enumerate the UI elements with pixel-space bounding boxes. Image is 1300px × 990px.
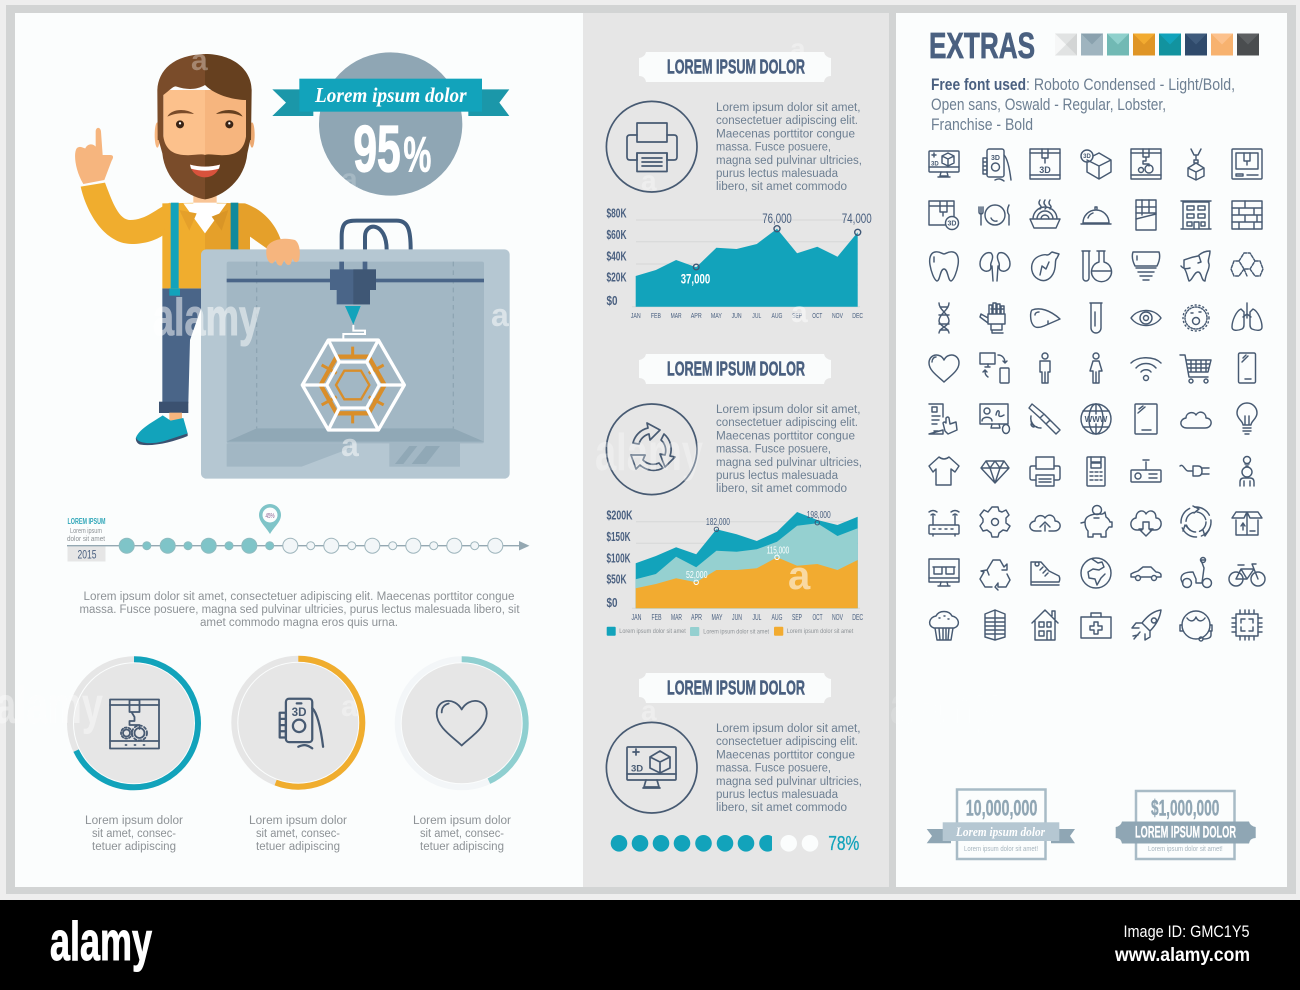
watermarks: alamy (153, 289, 260, 347)
icon: cloche (1081, 207, 1111, 224)
body text: libero, sit amet commodo (716, 483, 847, 495)
alamy logo: alamy (50, 910, 152, 972)
icon: DNA (939, 303, 949, 333)
icon: touch phone (929, 404, 957, 434)
icon: printer (1030, 457, 1060, 486)
body text: Lorem ipsum dolor sit amet, (716, 404, 860, 416)
icon: car (1131, 567, 1161, 580)
badge: 10,000,000: 10,000,000 (966, 796, 1037, 820)
paragraph (80, 591, 520, 629)
series: orange (636, 557, 858, 608)
x axis months: JAN (631, 311, 641, 320)
data callouts (686, 509, 831, 584)
x axis months: JUL (752, 612, 762, 622)
extras heading: EXTRAS (929, 25, 1035, 66)
illustration: man with 3D printer (75, 52, 510, 479)
x axis months: AUG (772, 612, 782, 622)
icon: www globe (1081, 404, 1111, 434)
icon: 3D printer (1030, 149, 1060, 179)
paragraph: amet commodo magna eros quis urna. (200, 617, 398, 629)
dot progress: 78%: 78% (828, 833, 859, 855)
body text: consectetuer adipiscing elit. (716, 417, 858, 429)
area chart 1 (606, 206, 872, 320)
timeline label: LOREM IPSUM (68, 517, 106, 526)
watermarks: alamy (595, 424, 703, 482)
stacked area chart (606, 508, 863, 636)
paragraph: massa. Fusce posuere, magna sed pulvinar ultricies, purus lectus malesuada libero, sit (80, 604, 520, 616)
icon: device sync (980, 353, 1009, 383)
data callouts: 198,000 (807, 509, 831, 521)
icon: phone in hand (983, 149, 1011, 181)
heading plate: LOREM IPSUM DOLOR (667, 56, 805, 78)
colour swatches (1055, 34, 1259, 56)
heading plate (639, 673, 831, 703)
icon: 3D cube: 3D (1083, 154, 1092, 160)
icon: printer 3D badge (929, 201, 958, 230)
heading plate (639, 52, 831, 82)
x axis months: JUL (752, 311, 761, 320)
x axis months: JUN (732, 612, 742, 622)
icon: wifi (1131, 358, 1161, 380)
icon: monitor with person (980, 404, 1010, 434)
data callouts: 182,000 (706, 516, 730, 528)
icon: light bulb (1237, 403, 1257, 434)
icon: person with idea (1240, 456, 1254, 486)
heading plate: LOREM IPSUM DOLOR (667, 678, 805, 700)
icon: molecules (1231, 253, 1263, 276)
icon: skyscraper (985, 610, 1005, 640)
body text (716, 723, 862, 814)
icon: liver (1031, 309, 1060, 327)
icon: 3D monitor in circle: 3D (631, 764, 643, 774)
caption: tetuer adipiscing (92, 841, 176, 853)
icon: monitor with 3D glasses (929, 559, 959, 586)
icon: 3D printer: 3D (1039, 165, 1051, 175)
caption: Lorem ipsum dolor (413, 815, 511, 827)
icon grid (929, 149, 1265, 641)
badge: 10,000,000: Lorem ipsum dolor (955, 824, 1046, 839)
x axis months: APR (691, 612, 702, 622)
body text: Lorem ipsum dolor sit amet, (716, 102, 860, 114)
icon: heart anatomy (1032, 252, 1059, 281)
icon: phone in hand: 3D (292, 706, 306, 719)
icon: piggy bank (1081, 506, 1112, 537)
icon: kidneys (980, 253, 1010, 281)
y axis labels (606, 206, 626, 308)
icon: house (1032, 610, 1058, 640)
badge: $1,000,000 (1116, 791, 1256, 859)
watermarks: a (791, 296, 808, 329)
x axis months: FEB (651, 311, 661, 320)
y axis labels: $20K (606, 270, 626, 284)
x axis months: MAR (671, 612, 682, 622)
font credits: : Roboto Condensed - Light/Bold, (1026, 75, 1235, 94)
watermarks: a (191, 44, 208, 77)
badge: 10,000,000 (927, 790, 1075, 859)
paragraph: Lorem ipsum dolor sit amet, consectetuer adipiscing elit. Maecenas porttitor congue (84, 591, 514, 603)
heading plate: LOREM IPSUM DOLOR (667, 358, 805, 380)
series: light teal (636, 523, 858, 608)
x axis months: DEC (852, 311, 864, 320)
body text: Maecenas porttitor congue (716, 749, 855, 761)
icon: rocket (1132, 610, 1161, 640)
x axis months: OCT (812, 311, 823, 320)
ribbon: Lorem ipsum dolor (314, 85, 468, 107)
x axis months: MAR (671, 311, 682, 320)
icon: heart (437, 701, 487, 746)
timeline label: 2015 (78, 548, 97, 562)
body text: libero, sit amet commodo (716, 802, 847, 814)
font credits: Franchise - Bold (931, 115, 1033, 134)
icon: cloud (1181, 412, 1211, 428)
icon: www globe: WWW (1085, 415, 1108, 424)
watermarks: a (491, 297, 509, 333)
body text: purus lectus malesuada (716, 789, 839, 801)
icon: printer in circle (606, 101, 697, 192)
icon: lungs (1232, 303, 1262, 330)
timeline (67, 504, 530, 562)
man (75, 54, 281, 445)
icon: shopping cart (1180, 355, 1211, 383)
timeline label: Lorem ipsum (70, 528, 102, 535)
icon: card reader (1087, 457, 1105, 486)
panel: middle (583, 13, 889, 887)
icon: bicycle (1229, 564, 1265, 586)
watermarks: a (641, 165, 657, 196)
caption: Lorem ipsum dolor (85, 815, 183, 827)
body text (716, 404, 862, 495)
3D printer (201, 221, 510, 479)
x axis months: DEC (852, 612, 863, 622)
section 1 (606, 52, 872, 320)
icon: 3D monitor (929, 151, 959, 177)
y axis labels: $60K (606, 228, 626, 242)
timeline label: dolor sit amet (67, 536, 105, 543)
icon: heart (929, 355, 959, 382)
badge: 10,000,000: Lorem ipsum dolor sit amet! (964, 846, 1038, 853)
font credits: Open sans, Oswald - Regular, Lobster, (931, 95, 1166, 114)
value: 95%: % (403, 126, 431, 182)
icon: projector (1131, 460, 1161, 482)
watermarks: a (341, 427, 359, 463)
y axis labels (606, 508, 633, 610)
body text (716, 102, 862, 193)
icon: smartphone (1238, 353, 1256, 383)
icon: cycle in circle (606, 404, 697, 495)
x axis months: SEP (792, 612, 802, 622)
body text: Maecenas porttitor congue (716, 430, 855, 442)
progress ring: mobile 3D (234, 659, 362, 853)
y axis labels: $40K (606, 250, 626, 264)
icon: gear (980, 507, 1010, 537)
watermarks: a (341, 163, 358, 196)
icon: dental implant (1132, 252, 1160, 280)
icon: test tube and flask (1082, 251, 1112, 282)
icon: diamond (981, 461, 1009, 483)
icon: test tube (1090, 303, 1102, 333)
x axis months (631, 311, 864, 320)
body text: massa. Fusce posuere, (716, 444, 831, 456)
value: 95%: 95 (353, 111, 401, 185)
caption: sit amet, consec- (420, 828, 504, 840)
image id: Image ID: GMC1Y5 (1124, 922, 1250, 941)
icon: broken tooth (1181, 251, 1210, 281)
data callouts: 74,000 (842, 210, 872, 226)
data callouts: 52,000 (686, 569, 708, 581)
caption (413, 815, 511, 853)
icon: printer with gears (1131, 149, 1161, 179)
icon: t-shirt (929, 457, 959, 485)
icon: cycle arrows (1181, 506, 1211, 537)
section 2 (606, 354, 863, 636)
y axis labels: $80K (606, 206, 626, 220)
caption (85, 815, 183, 853)
icon: robot hand (980, 303, 1005, 333)
icon: satellite (1029, 404, 1060, 434)
icon: plate and cutlery (979, 205, 1009, 225)
x axis months: OCT (812, 612, 822, 622)
icon: cloud upload (1030, 515, 1060, 531)
icon: recycle (980, 560, 1010, 590)
timeline nodes: completed (119, 538, 274, 553)
series: teal (636, 512, 858, 608)
progress ring: heart (398, 659, 526, 853)
progress ring: 3D printer (70, 659, 198, 853)
caption: sit amet, consec- (92, 828, 176, 840)
timeline axis (67, 541, 530, 550)
body text: Lorem ipsum dolor sit amet, (716, 723, 860, 735)
timeline nodes: remaining (283, 538, 503, 553)
caption: Lorem ipsum dolor (249, 815, 347, 827)
caption: tetuer adipiscing (256, 841, 340, 853)
icon: office building (1181, 201, 1211, 229)
y axis labels: $200K (606, 508, 633, 522)
x axis months: SEP (792, 311, 802, 320)
section 3 (606, 673, 862, 855)
icon: 3D cube (1081, 150, 1111, 179)
body text: massa. Fusce posuere, (716, 142, 831, 154)
icon: man (1040, 353, 1050, 383)
footer bar (0, 900, 1300, 990)
body text: consectetuer adipiscing elit. (716, 736, 858, 748)
x axis months (632, 612, 863, 622)
body text: magna sed pulvinar ultricies, (716, 457, 862, 469)
body text: purus lectus malesuada (716, 168, 839, 180)
icon: tablet (1135, 404, 1157, 434)
font credits (931, 75, 1235, 134)
x axis months: JUN (732, 311, 742, 320)
body text: consectetuer adipiscing elit. (716, 115, 858, 127)
dot progress: 78% (611, 833, 859, 855)
badge: $1,000,000: Lorem ipsum dolor sit amet! (1148, 846, 1223, 853)
panel: left (15, 13, 583, 887)
icon: headset support (1180, 611, 1212, 641)
y axis labels: $0 (606, 595, 618, 610)
icon: earth (1081, 558, 1111, 588)
icon: open box (1232, 512, 1262, 535)
body text: massa. Fusce posuere, (716, 763, 831, 775)
icon: first aid kit (1081, 613, 1111, 638)
watermarks: alamy (890, 677, 998, 735)
data callouts (681, 210, 872, 286)
icon: scooter (1181, 558, 1212, 588)
font credits: Free font used (931, 75, 1026, 94)
x axis months: MAY (711, 311, 722, 320)
icon: chocolate bar (1136, 200, 1156, 230)
icon: brick wall (1232, 201, 1262, 229)
panel: extras (896, 13, 1287, 887)
watermarks: a (790, 33, 806, 64)
area series (636, 229, 858, 307)
icon: sneaker (1031, 562, 1060, 585)
body text: purus lectus malesuada (716, 470, 839, 482)
icon: printer with gears (110, 700, 159, 748)
ribbon (272, 79, 509, 116)
data callouts: 37,000 (681, 270, 710, 286)
timeline label (67, 517, 106, 562)
y axis labels: $100K (606, 550, 631, 566)
y axis labels: $0 (606, 294, 618, 308)
icon: noodles bowl (1030, 200, 1060, 228)
caption: sit amet, consec- (256, 828, 340, 840)
icon: phone in hand (280, 699, 323, 748)
body text: libero, sit amet commodo (716, 181, 847, 193)
x axis months: MAY (712, 612, 723, 622)
icon: wifi router (929, 510, 959, 536)
icon: eye (1131, 310, 1161, 326)
x axis months: AUG (772, 311, 783, 320)
icon: tooth (930, 252, 958, 281)
website: www.alamy.com (1114, 945, 1250, 966)
x axis months: NOV (832, 311, 843, 320)
icon: muffin (930, 612, 958, 640)
data callouts: 115,000 (767, 544, 789, 556)
x axis months: NOV (832, 612, 843, 622)
heading plate (639, 354, 831, 384)
watermarks: a (641, 695, 657, 726)
legend: Lorem ipsum dolor sit amet (619, 629, 686, 635)
body text: magna sed pulvinar ultricies, (716, 776, 862, 788)
icon: virus (1183, 305, 1209, 331)
watermarks: a (341, 690, 358, 723)
legend: Lorem ipsum dolor sit amet (787, 629, 854, 635)
location pin: 45% (259, 504, 281, 534)
body text: magna sed pulvinar ultricies, (716, 155, 862, 167)
legend: Lorem ipsum dolor sit amet (703, 630, 769, 636)
icon: printer 3D badge: 3D (948, 220, 956, 228)
icon: phone in hand: 3D (991, 155, 1000, 162)
percentage circle (319, 52, 462, 196)
body text: Maecenas porttitor congue (716, 128, 855, 140)
caption: tetuer adipiscing (420, 841, 504, 853)
y axis labels: $150K (606, 529, 631, 544)
icon: woman (1090, 353, 1102, 383)
icon: cloud download (1131, 511, 1161, 536)
caption (249, 815, 347, 853)
watermarks (0, 33, 998, 735)
x axis months: JAN (632, 612, 642, 622)
icon: microchip (1232, 610, 1262, 640)
badge: $1,000,000: $1,000,000 (1151, 796, 1219, 820)
watermarks: a (788, 554, 811, 598)
icon: 3D monitor: 3D (931, 162, 939, 168)
data callouts: 76,000 (762, 210, 792, 226)
x axis months: FEB (652, 612, 662, 622)
icon: 3D monitor in circle (606, 722, 697, 813)
icon: robot arm with model (1188, 149, 1204, 180)
location pin: 45%: 45% (266, 511, 275, 520)
legend (607, 627, 854, 636)
y axis labels: $50K (606, 572, 627, 586)
icon: desktop printer (1232, 149, 1262, 179)
x axis months: APR (691, 311, 702, 320)
icon: power plug (1180, 465, 1209, 476)
